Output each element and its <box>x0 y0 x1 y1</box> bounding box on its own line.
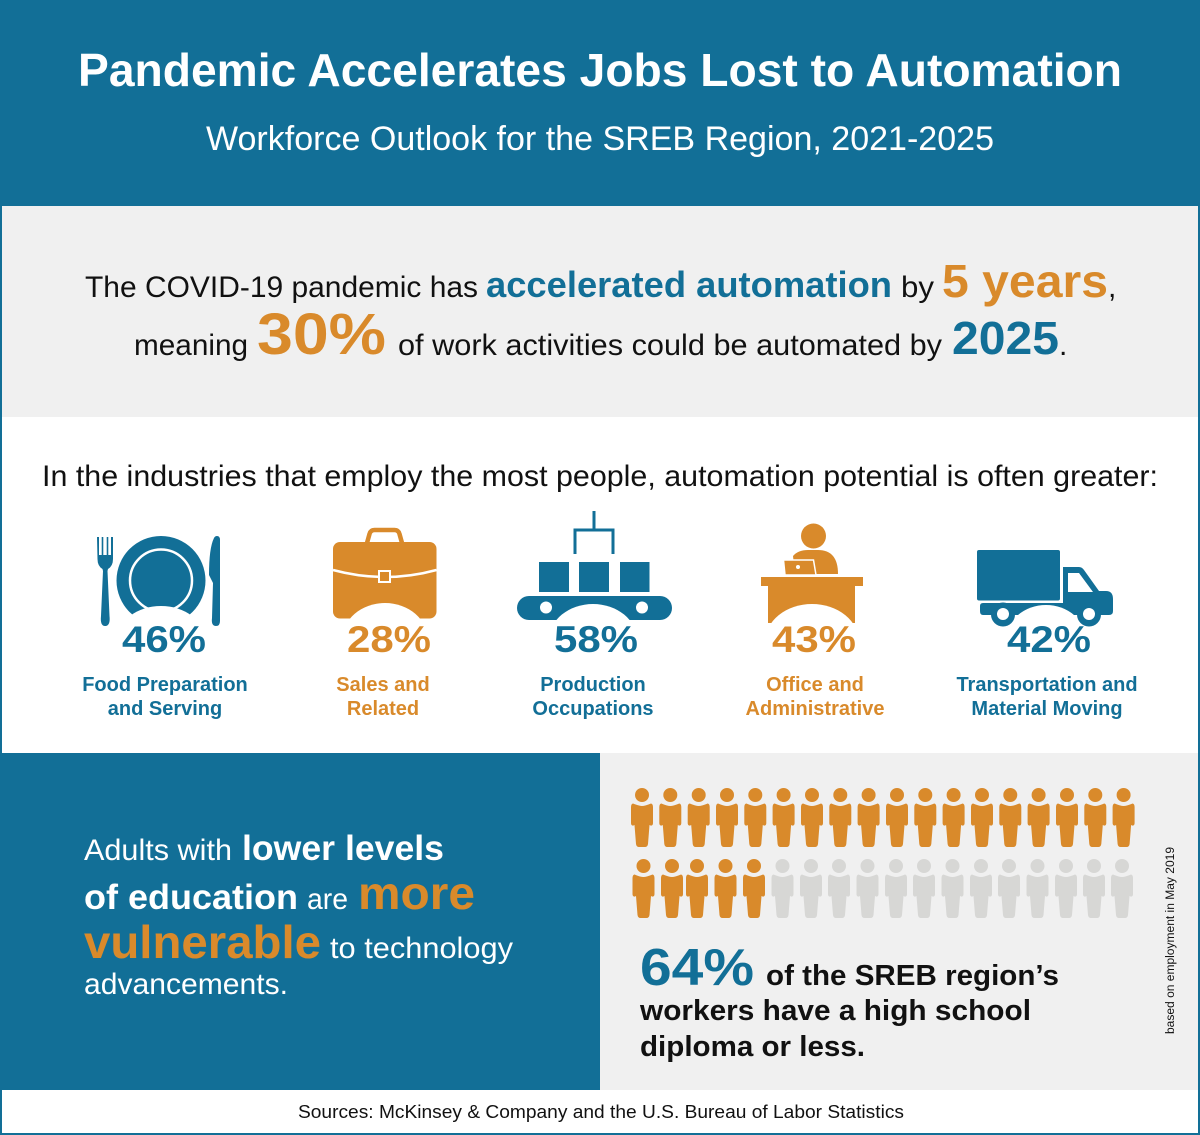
statistic text: of the SREB region’s <box>766 960 1059 992</box>
statistic text: workers have a high school <box>639 995 1031 1027</box>
industry: food preparation: 46% <box>122 619 206 660</box>
icon: delivery truck <box>977 550 1113 675</box>
industry: transportation: Transportation and <box>956 674 1138 696</box>
panel: key message <box>2 206 1198 417</box>
panel: key message: by <box>901 271 934 304</box>
panel: education vulnerability <box>0 753 600 1090</box>
industry: transportation <box>956 550 1138 720</box>
industry: office: Administrative <box>746 698 884 720</box>
industry: office <box>746 524 884 720</box>
industry: sales <box>333 530 436 720</box>
statistic text: 64% <box>640 939 754 997</box>
industry: food preparation: Food Preparation <box>82 674 248 696</box>
panel: key message: accelerated automation <box>486 264 892 305</box>
panel: education vulnerability: advancements. <box>84 968 288 1001</box>
panel: education vulnerability: are <box>307 883 348 916</box>
statistic text <box>639 939 1059 1063</box>
header banner <box>0 0 1200 205</box>
industry: food preparation: and Serving <box>108 698 222 720</box>
icon: fork, plate and knife <box>97 536 220 674</box>
icon: conveyor belt <box>517 511 672 676</box>
subtitle: Workforce Outlook for the SREB Region, 2021-2025 <box>206 120 994 158</box>
industry: office: Office and <box>766 674 864 696</box>
intro sentence: In the industries that employ the most people, automation potential is often greater: <box>42 460 1158 493</box>
industry: sales: Related <box>347 698 419 720</box>
industry: sales: Sales and <box>336 674 430 696</box>
panel: education vulnerability: vulnerable <box>84 916 321 968</box>
panel: key message: , <box>1108 271 1116 304</box>
footnote: based on employment in May 2019 <box>1165 847 1177 1034</box>
panel: education vulnerability: of education <box>84 878 298 917</box>
panel: workers statistic <box>600 753 1198 1090</box>
industry: sales: 28% <box>347 619 431 660</box>
industry: production: Occupations <box>532 698 654 720</box>
industry: transportation: 42% <box>1007 619 1091 660</box>
panel: key message: of work activities could be automated by <box>398 329 942 362</box>
sources: Sources: McKinsey & Company and the U.S. Bureau of Labor Statistics <box>298 1101 904 1122</box>
panel: education vulnerability: more <box>358 867 475 919</box>
icon: briefcase <box>333 530 436 677</box>
icon: person at desk <box>761 524 863 680</box>
panel: key message: The COVID-19 pandemic has <box>85 271 478 304</box>
pictogram: first row of workers <box>631 788 1135 847</box>
industry: food preparation <box>82 536 248 720</box>
panel: education vulnerability: lower levels <box>242 829 444 868</box>
industry: office: 43% <box>772 619 856 660</box>
title: Pandemic Accelerates Jobs Lost to Automation <box>78 44 1122 96</box>
panel: education vulnerability: to technology <box>330 932 513 965</box>
panel: key message: 5 years <box>942 255 1108 307</box>
panel: key message: meaning <box>134 329 248 362</box>
panel: key message: . <box>1059 329 1067 362</box>
pictogram: second row of workers <box>632 859 1133 918</box>
industry: production: Production <box>540 674 646 696</box>
panel: education vulnerability: Adults with <box>84 834 232 867</box>
industry: transportation: Material Moving <box>971 698 1123 720</box>
industry: production <box>517 511 672 720</box>
industry: production: 58% <box>554 619 638 660</box>
panel: key message: 30% <box>257 302 386 367</box>
statistic text: diploma or less. <box>640 1031 865 1063</box>
panel: key message: 2025 <box>952 312 1059 364</box>
